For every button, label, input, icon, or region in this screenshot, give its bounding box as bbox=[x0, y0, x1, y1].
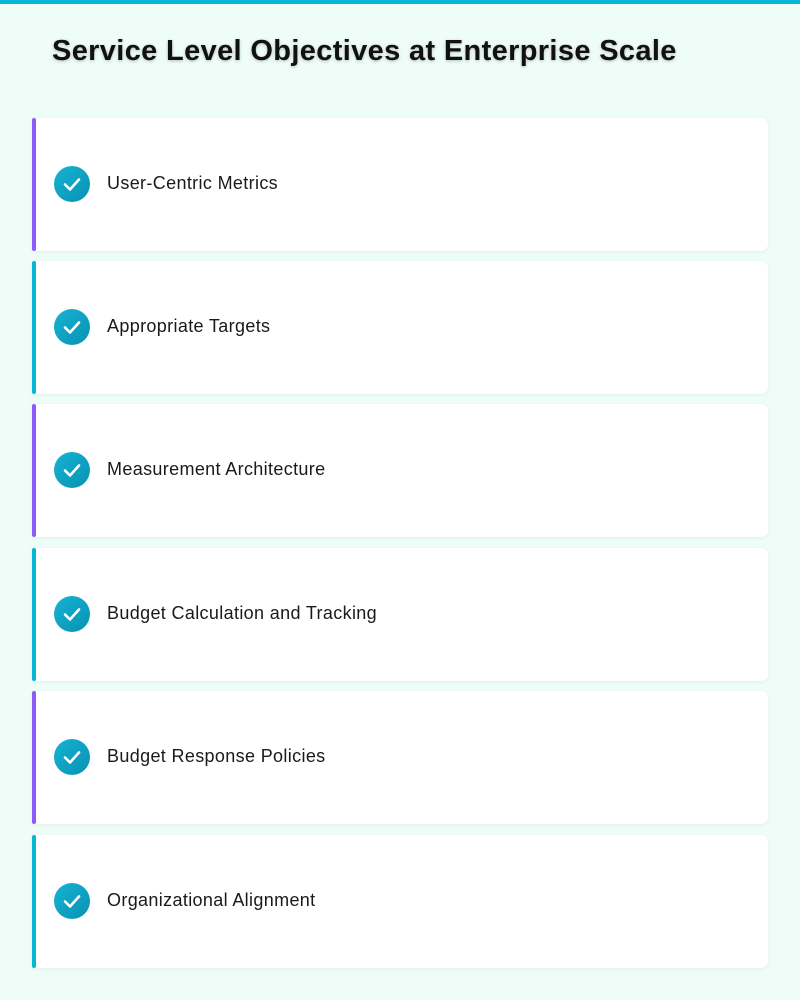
card: User-Centric Metrics bbox=[32, 118, 768, 251]
label: Budget Calculation and Tracking bbox=[107, 603, 377, 623]
label: User-Centric Metrics bbox=[107, 173, 278, 193]
title: Service Level Objectives at Enterprise Scale bbox=[52, 35, 677, 67]
label: Measurement Architecture bbox=[107, 459, 326, 479]
label: Organizational Alignment bbox=[107, 890, 316, 910]
card: Measurement Architecture bbox=[32, 404, 768, 537]
icon: check bbox=[54, 883, 90, 919]
icon: check bbox=[54, 452, 90, 488]
card: Appropriate Targets bbox=[32, 261, 768, 394]
card: Organizational Alignment bbox=[32, 835, 768, 968]
icon: check bbox=[54, 739, 90, 775]
icon: check bbox=[54, 596, 90, 632]
icon: check bbox=[54, 166, 90, 202]
label: Appropriate Targets bbox=[107, 316, 270, 336]
icon: check bbox=[54, 309, 90, 345]
card: Budget Response Policies bbox=[32, 691, 768, 824]
label: Budget Response Policies bbox=[107, 746, 326, 766]
card: Budget Calculation and Tracking bbox=[32, 548, 768, 681]
